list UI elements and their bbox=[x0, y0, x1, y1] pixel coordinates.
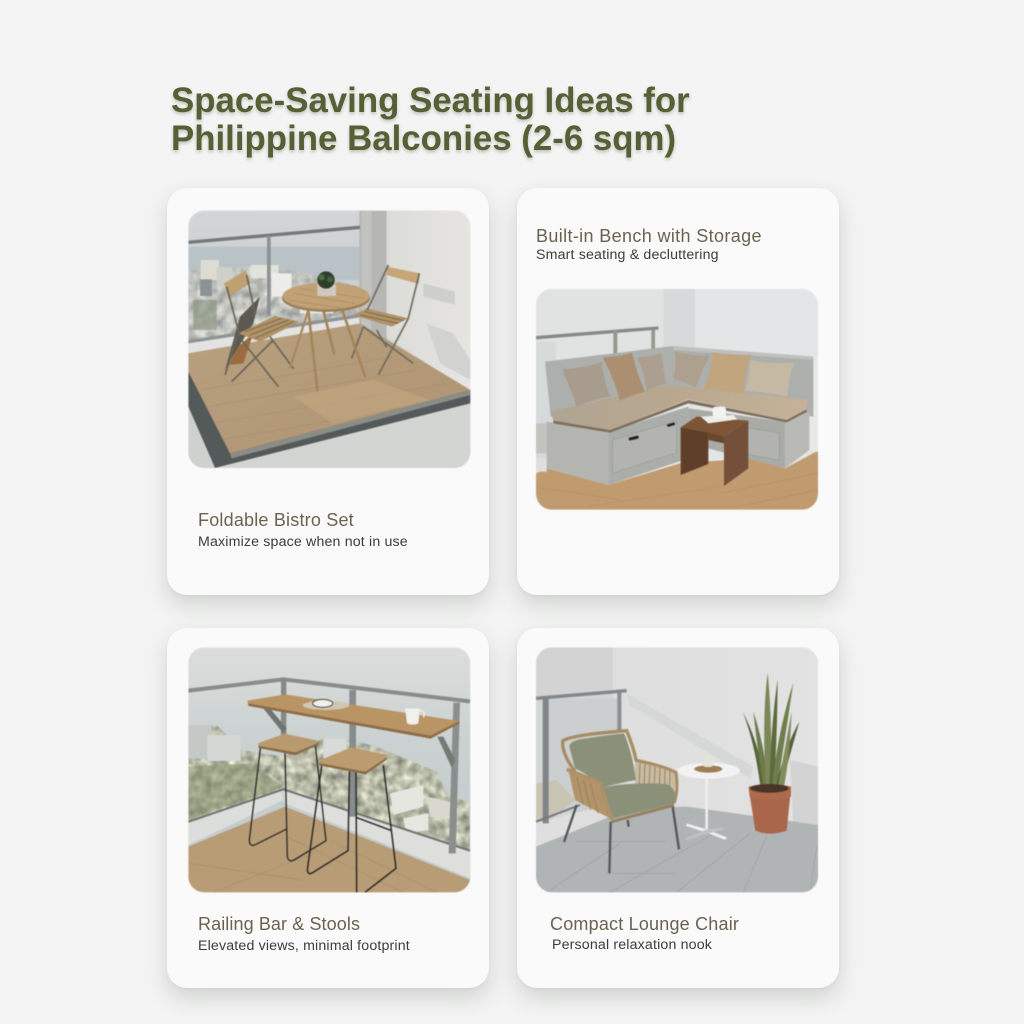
railing bbox=[536, 328, 658, 338]
title: Philippine Balconies (2-6 sqm) bbox=[171, 119, 676, 158]
image: lounge chair, side table and plant bbox=[535, 647, 818, 893]
sansevieria plant bbox=[743, 673, 799, 790]
title: Space-Saving Seating Ideas for bbox=[171, 81, 690, 120]
base bbox=[547, 422, 608, 485]
ledge bbox=[188, 790, 283, 845]
panel: foldable bistro set bbox=[167, 188, 489, 595]
floor bbox=[536, 807, 818, 892]
right chair bbox=[352, 265, 420, 375]
caption: built-in bench: Smart seating & decluttering bbox=[536, 247, 719, 263]
image: railing bar with two stools bbox=[188, 647, 471, 894]
caption: compact lounge chair: Personal relaxation nook bbox=[552, 937, 712, 953]
deck bbox=[188, 323, 470, 468]
city bbox=[188, 260, 362, 343]
wall shadows bbox=[423, 283, 455, 305]
stool 1 bbox=[249, 745, 326, 861]
coffee table bbox=[681, 417, 748, 437]
seat cushions bbox=[551, 385, 808, 430]
bench back bbox=[545, 346, 813, 417]
glass base rail bbox=[188, 789, 470, 851]
book and cup bbox=[701, 415, 737, 423]
image: L-shaped bench with drawers bbox=[535, 288, 819, 510]
railing bbox=[536, 691, 627, 698]
left chair bbox=[224, 271, 300, 387]
floor bbox=[188, 807, 470, 892]
label: railing bar: Railing Bar & Stools bbox=[198, 914, 360, 934]
city bbox=[188, 723, 470, 853]
panel: railing bar and stools bbox=[167, 628, 489, 988]
brackets bbox=[263, 708, 287, 733]
label: compact lounge chair: Compact Lounge Chair bbox=[550, 914, 739, 934]
panel: built-in bench with storage bbox=[517, 188, 839, 595]
plate and cup bbox=[303, 701, 349, 710]
top railing and posts bbox=[188, 679, 470, 701]
panel: compact lounge chair bbox=[517, 628, 839, 988]
wall shadow bbox=[684, 728, 752, 777]
deck dark frame bbox=[188, 372, 470, 468]
floor bbox=[536, 451, 818, 510]
label: built-in bench: Built-in Bench with Storage bbox=[536, 226, 762, 246]
cushions bbox=[562, 362, 610, 407]
caption: foldable bistro set: Maximize space when not in use bbox=[198, 534, 408, 550]
image: foldable bistro set on wooden deck bbox=[188, 210, 472, 468]
side table bbox=[677, 755, 740, 840]
round table bbox=[282, 283, 370, 390]
counter bbox=[247, 694, 459, 738]
terracotta pot bbox=[749, 784, 791, 834]
potted plant bbox=[317, 271, 336, 296]
column and wall bbox=[359, 211, 387, 344]
caption: railing bar: Elevated views, minimal footprint bbox=[198, 938, 410, 954]
title bbox=[171, 81, 691, 161]
railing bbox=[188, 227, 360, 242]
drawers bbox=[612, 421, 677, 473]
stool 2 bbox=[307, 765, 396, 892]
lounge chair bbox=[563, 731, 679, 873]
label: foldable bistro set: Foldable Bistro Set bbox=[198, 510, 354, 530]
